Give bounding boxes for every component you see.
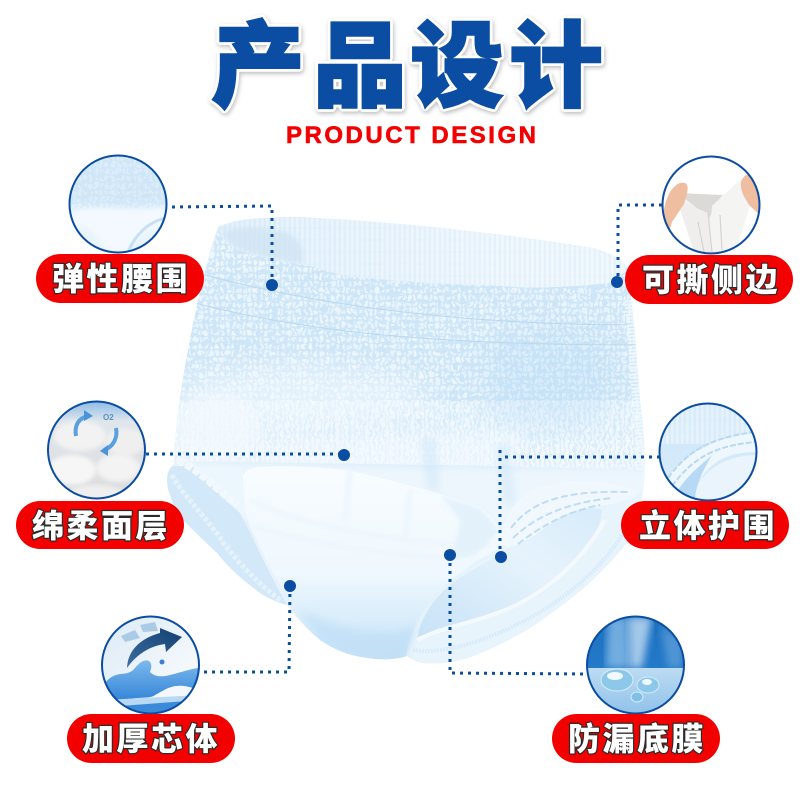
waist back rim — [496, 240, 627, 288]
label pill — [36, 254, 204, 303]
lower body — [172, 462, 644, 520]
label text: 弹性腰围 — [52, 261, 190, 297]
icon: hands tearing side — [661, 156, 762, 255]
subtitle: PRODUCT DESIGN — [286, 122, 536, 149]
callout: leakproof film — [552, 616, 720, 763]
title: 产 — [212, 15, 304, 119]
title: 计 — [510, 15, 602, 119]
icon: frill closeup — [660, 404, 758, 500]
title: 设 — [410, 15, 504, 119]
callout: thick core — [67, 616, 235, 763]
marker dots — [266, 276, 623, 592]
right leg cavity and rim — [407, 490, 643, 664]
left leg frill — [167, 466, 287, 605]
title — [212, 15, 602, 119]
label pill — [67, 714, 235, 763]
title: 计 — [510, 15, 602, 119]
right side seam — [629, 300, 642, 470]
label pill — [625, 255, 793, 304]
product illustration: diaper pants — [167, 217, 645, 664]
leader line: soft top layer — [146, 452, 344, 456]
label pill — [552, 714, 720, 763]
label pill — [16, 501, 184, 549]
icon: wave and arrow — [100, 616, 200, 715]
seam lines — [195, 275, 640, 345]
callout: soft top layer — [16, 402, 184, 549]
icon: waistband closeup — [70, 156, 166, 255]
leader line: leak guard — [500, 450, 660, 557]
absorbent pad — [243, 466, 507, 660]
label pill — [621, 501, 789, 549]
label text: 防漏底膜 — [568, 721, 706, 757]
leader line: leakproof film — [450, 555, 585, 674]
title: 品 — [314, 15, 406, 119]
right frill — [502, 510, 578, 548]
icon: cotton surface with airflow arrows — [48, 402, 145, 503]
label text: 加厚芯体 — [82, 721, 220, 757]
smocked elastic texture — [174, 231, 644, 470]
oxygen label: O2 — [103, 413, 114, 422]
icon: water droplets on breathable film — [585, 616, 687, 718]
label text: 绵柔面层 — [32, 508, 170, 544]
callout: tearable side — [625, 156, 793, 304]
title: 产 — [212, 15, 304, 119]
icon: airflow arrows — [76, 416, 116, 450]
callout: leak guard — [621, 404, 789, 549]
title: 品 — [314, 15, 406, 119]
diaper body — [167, 217, 645, 664]
label text: 可撕侧边 — [642, 262, 780, 298]
leader line: elastic waistband — [172, 206, 272, 285]
label text: 立体护围 — [639, 508, 777, 544]
callout: elastic waistband — [36, 156, 204, 303]
icon: curved arrow — [127, 628, 182, 668]
leader line: tearable side — [618, 205, 662, 282]
title: 设 — [410, 15, 504, 119]
leader line: thick core — [204, 586, 290, 672]
